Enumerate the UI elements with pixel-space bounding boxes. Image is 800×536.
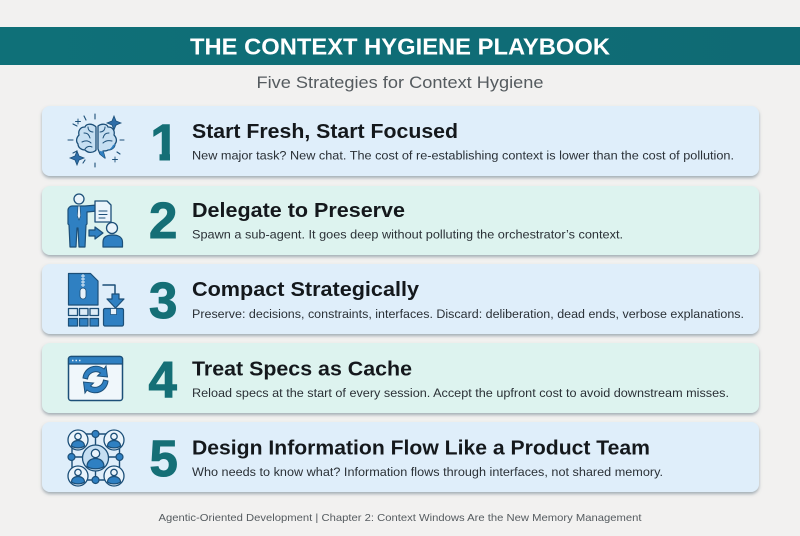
icon: zip file compressing into box <box>68 274 124 326</box>
panel: strategy 2 <box>42 186 759 255</box>
heading: Delegate to Preserve <box>192 200 405 222</box>
heading: Design Information Flow Like a Product Team <box>192 438 650 460</box>
step number 1: 1 <box>150 114 179 171</box>
description: Preserve: decisions, constraints, interfaces. Discard: deliberation, dead ends, verbose explanations. <box>192 307 744 321</box>
description: New major task? New chat. The cost of re-establishing context is lower than the cost of pollution. <box>192 148 734 162</box>
description: Spawn a sub-agent. It goes deep without polluting the orchestrator’s context. <box>192 228 623 242</box>
icon: brain with sparkles <box>68 114 124 167</box>
panel: strategy 1 <box>42 106 759 176</box>
step number 3: 3 <box>149 272 177 329</box>
icon: network of people <box>68 430 124 486</box>
description: Who needs to know what? Information flows through interfaces, not shared memory. <box>192 465 663 479</box>
panel: strategy 5 <box>42 422 759 492</box>
heading: Treat Specs as Cache <box>192 358 412 380</box>
step number 4: 4 <box>148 351 178 408</box>
heading: Compact Strategically <box>192 279 420 301</box>
icon: browser window with refresh arrows <box>68 356 122 400</box>
panel: strategy 4 <box>42 343 759 413</box>
icon: person delegating to sub-agent <box>68 194 122 247</box>
panel: strategy 3 <box>42 264 759 334</box>
step number 2: 2 <box>149 192 177 249</box>
footer: Agentic-Oriented Development | Chapter 2: Context Windows Are the New Memory Management <box>158 512 642 524</box>
title banner: THE CONTEXT HYGIENE PLAYBOOK <box>190 34 610 60</box>
title banner <box>0 27 800 65</box>
step number 5: 5 <box>150 430 178 487</box>
description: Reload specs at the start of every session. Accept the upfront cost to avoid downstream misses. <box>192 386 729 400</box>
subtitle: Five Strategies for Context Hygiene <box>256 73 544 92</box>
heading: Start Fresh, Start Focused <box>192 121 458 143</box>
